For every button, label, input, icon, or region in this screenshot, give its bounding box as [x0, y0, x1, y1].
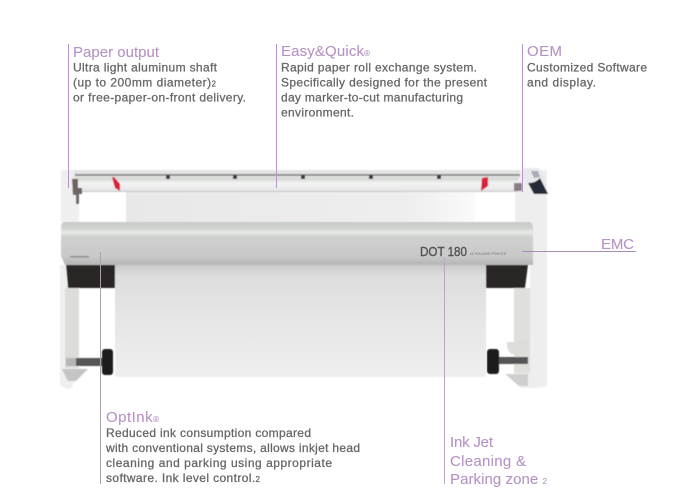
callout: ink jet cleaning and parking zone	[450, 434, 548, 488]
callout: paper output: or free-paper-on-front delivery.	[73, 90, 246, 104]
callout: OptInk	[105, 409, 360, 485]
left roller mount	[72, 179, 82, 204]
model subtitle: ULTRA WIDE PRINTER	[470, 252, 506, 256]
callout: easy and quick: environment.	[281, 106, 354, 120]
right leg	[514, 170, 547, 388]
callout: OEM: Customized Software	[527, 60, 647, 74]
callout: OEM: and display.	[527, 76, 596, 90]
callout: paper output	[73, 44, 246, 104]
callout: OptInk: OptInk®	[106, 409, 159, 426]
top rail	[74, 170, 520, 178]
callout: OptInk: cleaning and parking using appropriate	[106, 456, 332, 470]
callout: EMC: EMC	[601, 236, 634, 253]
right knob	[507, 339, 530, 354]
callout: paper output: (up to 200mm diameter)2	[73, 76, 217, 90]
leader line: paper output	[68, 44, 70, 188]
lower paper	[115, 265, 486, 377]
leader line: OptInk	[100, 252, 102, 484]
callout: ink jet cleaning and parking zone: Ink Jet	[450, 434, 494, 451]
control panel	[523, 168, 548, 194]
upper paper	[126, 192, 475, 223]
right foot	[505, 374, 528, 386]
callout: OEM: OEM	[527, 43, 562, 60]
callout: ink jet cleaning and parking zone: Parking zone 2	[450, 471, 548, 488]
left spindle	[67, 358, 103, 366]
callout: OEM	[527, 43, 647, 90]
left foot	[62, 369, 88, 381]
red roller marks	[112, 177, 120, 191]
rail clips	[166, 175, 441, 179]
callout: easy and quick: Specifically designed for the present	[281, 76, 488, 90]
callout: OptInk: with conventional systems, allows inkjet head	[105, 441, 360, 455]
leader line: ink jet	[444, 258, 446, 484]
right spindle	[498, 357, 528, 364]
dark blocks	[66, 265, 115, 288]
leader line: easy and quick	[276, 44, 278, 188]
callout: OptInk: software. Ink level control.2	[106, 471, 261, 485]
callout: paper output: Paper output	[73, 44, 160, 61]
callout: paper output: Ultra light aluminum shaft	[73, 60, 218, 74]
leader line: EMC	[522, 250, 636, 252]
callout: easy and quick: Rapid paper roll exchange system.	[281, 60, 477, 74]
callout: easy and quick: day marker-to-cut manufacturing	[281, 90, 463, 104]
left leg	[60, 170, 79, 389]
paper roller	[72, 178, 518, 192]
front beam	[61, 222, 533, 265]
callout: easy and quick: Easy&Quick®	[281, 43, 370, 60]
right roller mount	[514, 183, 522, 191]
printer photo	[60, 168, 548, 389]
beam small label	[70, 256, 89, 258]
leader line: OEM	[522, 44, 524, 192]
callout: easy and quick	[281, 43, 488, 120]
callout: OptInk: Reduced ink consumption compared	[106, 426, 311, 440]
callout: ink jet cleaning and parking zone: Cleaning &	[450, 453, 526, 470]
model name: DOT 180	[420, 244, 467, 259]
